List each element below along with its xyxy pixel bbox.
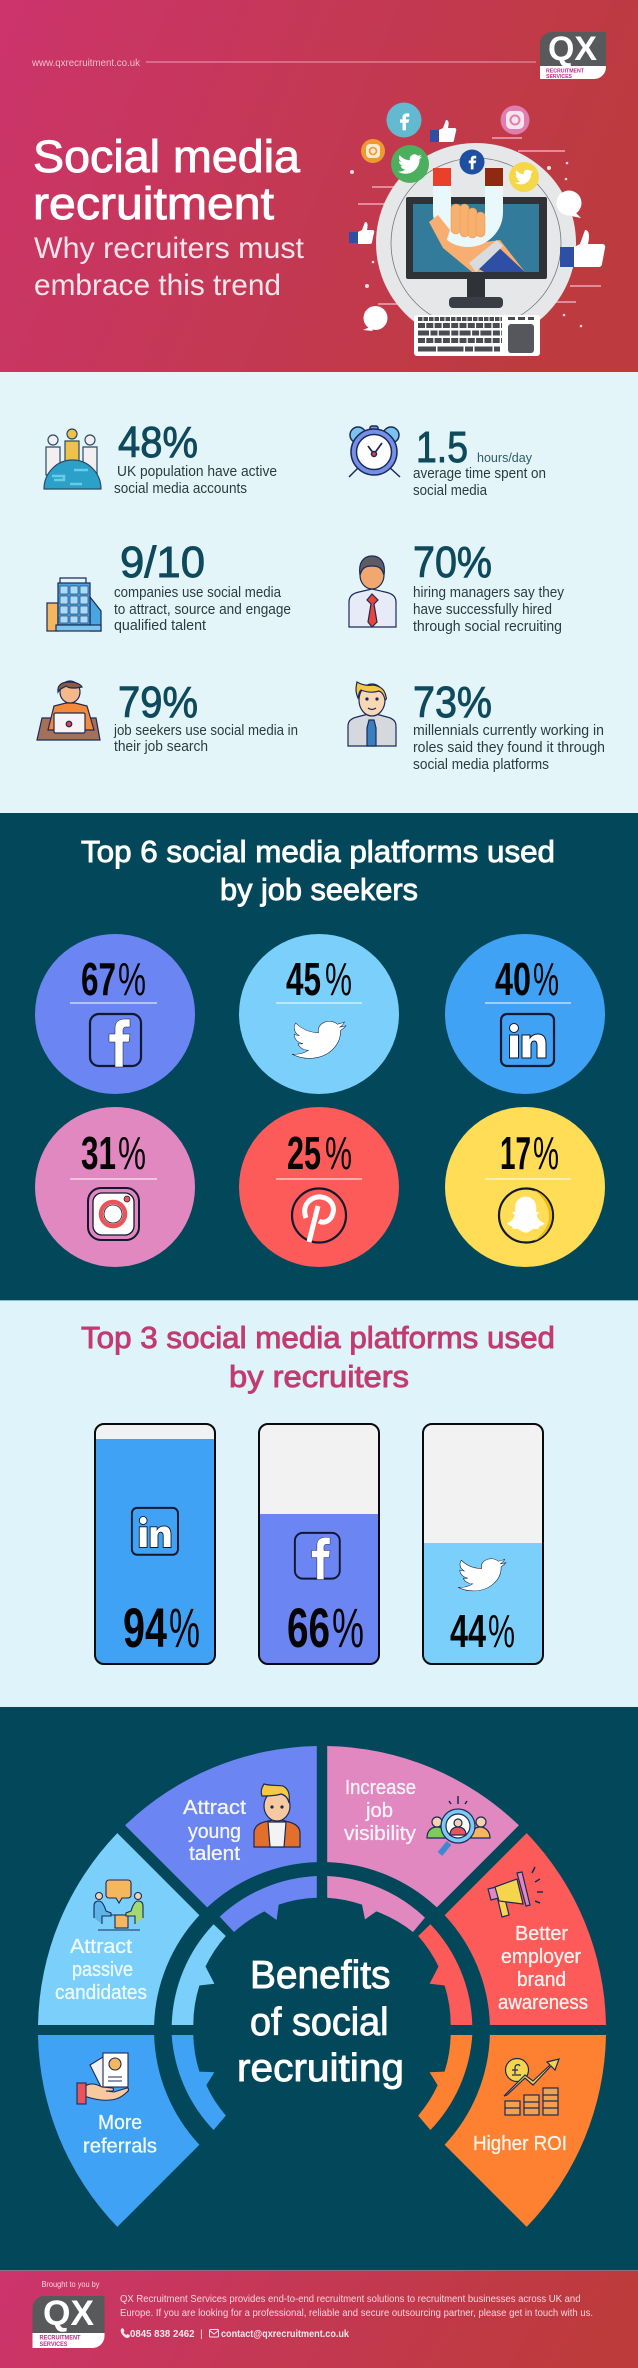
panel: hero header <box>0 0 638 372</box>
segment: attract young talent: young <box>188 1821 241 1843</box>
segment: increase job visibility: job <box>365 1800 393 1822</box>
stat: 9 out of 10: qualified talent <box>114 618 206 634</box>
panel: benefits of social recruiting <box>0 1707 638 2270</box>
monitor <box>406 197 547 308</box>
icon: search candidates <box>427 1796 490 1854</box>
heading: Top 6 social media platforms used <box>81 834 555 869</box>
segment: better employer brand awareness <box>418 1833 606 2025</box>
company description: QX Recruitment Services provides end-to-end recruitment solutions to recruitment businesses across UK and <box>120 2293 581 2305</box>
stat: 48 percent: 48% <box>118 418 198 467</box>
segment: attract young talent: Attract <box>183 1797 246 1819</box>
circle: snapchat 17 percent: % <box>533 1127 559 1179</box>
centre heading: Benefits <box>250 1954 390 1997</box>
icon: office building <box>47 578 101 631</box>
logo: QX recruitment services <box>540 30 606 80</box>
bar: linkedin 94 percent: % <box>169 1596 200 1659</box>
segment: increase job visibility <box>327 1746 519 1932</box>
circle: instagram 31 percent <box>35 1107 195 1267</box>
panel: top 3 platforms for recruiters <box>0 1300 638 1707</box>
heading: Top 3 social media platforms used <box>81 1320 555 1355</box>
circle: facebook 67 percent: % <box>118 953 146 1005</box>
contact details: 0845 838 2462 <box>130 2328 195 2340</box>
panel: footer <box>0 2270 638 2368</box>
subtitle: Why recruiters must <box>34 232 305 265</box>
icon: referral hand <box>77 2053 128 2104</box>
panel: top 6 platforms for job seekers <box>0 813 638 1300</box>
company description: Europe. If you are looking for a professional, reliable and secure outsourcing partner, please get in touch with us. <box>120 2307 593 2319</box>
icon: return on investment <box>504 2058 559 2115</box>
icon: linkedin <box>132 1508 178 1555</box>
segment: better employer brand awareness: brand <box>517 1969 566 1991</box>
stat: 9 out of 10 <box>47 538 291 634</box>
bar: facebook 66 percent <box>259 1424 379 1664</box>
heading <box>81 1320 555 1394</box>
icon: job seeker at laptop <box>37 681 100 740</box>
brought to you by label: Brought to you by <box>42 2279 100 2289</box>
circle: facebook 67 percent: 67 <box>81 953 116 1005</box>
segment: attract passive candidates <box>38 1833 226 2025</box>
company description <box>120 2293 593 2319</box>
stat: 73 percent: social media platforms <box>413 757 549 773</box>
circle: twitter 45 percent <box>239 934 399 1094</box>
centre heading: recruiting <box>237 2047 404 2090</box>
circle: linkedin 40 percent: 40 <box>495 953 531 1005</box>
illustration: magnet attracting social media <box>349 102 605 356</box>
thumbs up icons <box>349 120 605 267</box>
segment: higher ROI: Higher ROI <box>473 2133 567 2155</box>
icon: facebook <box>295 1533 340 1580</box>
contact details: contact@qxrecruitment.co.uk <box>221 2328 349 2340</box>
bar: twitter 44 percent <box>423 1424 543 1664</box>
speech bubbles <box>363 190 582 331</box>
logo: QX recruitment services: RECRUITMENT <box>40 2334 81 2342</box>
icon: millennial worker <box>348 682 396 746</box>
centre heading: of social <box>250 2001 388 2044</box>
segment: increase job visibility: visibility <box>344 1823 416 1845</box>
bar: facebook 66 percent: 66 <box>287 1596 330 1659</box>
stat: 73 percent <box>348 678 605 773</box>
title: recruitment <box>33 178 275 229</box>
icon: alarm clock <box>349 426 400 477</box>
heading: by job seekers <box>220 872 418 907</box>
segment: higher ROI <box>418 2035 606 2227</box>
circle: pinterest 25 percent <box>239 1107 399 1267</box>
segment: more referrals <box>38 2035 226 2227</box>
icon: hiring manager <box>349 556 396 627</box>
circle: facebook 67 percent <box>35 934 195 1094</box>
stat: 79 percent <box>37 678 298 755</box>
segment: increase job visibility: Increase <box>345 1777 416 1799</box>
stat: 1.5 hours per day: social media <box>413 483 488 499</box>
stat: 70 percent <box>349 538 565 635</box>
icon: twitter <box>458 1559 506 1591</box>
logo: QX recruitment services: RECRUITMENT <box>546 68 584 74</box>
bar: twitter 44 percent: 44 <box>450 1605 486 1657</box>
icon: twitter <box>292 1021 346 1058</box>
segment: better employer brand awareness: employer <box>501 1946 581 1968</box>
circle: instagram 31 percent: 31 <box>81 1127 116 1179</box>
icon: meeting <box>94 1880 143 1930</box>
logo: QX recruitment services <box>32 2294 104 2348</box>
stat: 73 percent: millennials currently working in <box>413 723 604 739</box>
segment: attract passive candidates: passive <box>72 1959 133 1981</box>
hand and magnet <box>429 168 525 272</box>
panel: key statistics <box>0 372 638 813</box>
stat: 70 percent: have successfully hired <box>413 602 552 618</box>
segment: attract young talent: talent <box>189 1843 240 1865</box>
stat: 9 out of 10: to attract, source and engage <box>114 602 291 618</box>
icon: snapchat <box>499 1188 553 1242</box>
stat: 48 percent: UK population have active <box>117 464 277 480</box>
stat: 9 out of 10: companies use social media <box>114 585 282 601</box>
stat: 73 percent: roles said they found it through <box>413 740 605 756</box>
icon: pinterest <box>292 1188 346 1242</box>
icon: people on globe <box>44 429 101 489</box>
bar: linkedin 94 percent: 94 <box>123 1596 167 1659</box>
centre heading <box>237 1954 404 2090</box>
heading <box>81 834 555 907</box>
title: Social media <box>33 131 301 182</box>
icon: instagram <box>88 1188 139 1240</box>
circle: pinterest 25 percent: % <box>325 1127 352 1179</box>
segment: better employer brand awareness: Better <box>515 1923 568 1945</box>
stat: 70 percent: through social recruiting <box>413 619 562 635</box>
circle: instagram 31 percent: % <box>118 1127 146 1179</box>
circle: linkedin 40 percent: % <box>533 953 559 1005</box>
stat: 9 out of 10: 9/10 <box>120 538 205 587</box>
stat: 48 percent: social media accounts <box>114 481 247 497</box>
segment: attract passive candidates: candidates <box>55 1982 147 2004</box>
icon: linkedin <box>501 1014 554 1066</box>
icon: facebook <box>90 1014 141 1067</box>
keyboard <box>414 315 540 356</box>
stat: 1.5 hours per day: 1.5 <box>416 423 468 472</box>
circle: snapchat 17 percent: 17 <box>500 1127 531 1179</box>
logo: QX recruitment services: QX <box>43 2294 95 2333</box>
stat: 1.5 hours per day: average time spent on <box>413 466 546 482</box>
stat: 79 percent: 79% <box>118 678 198 727</box>
subtitle <box>34 232 305 302</box>
title <box>33 131 301 229</box>
segment: attract young talent <box>125 1746 317 1932</box>
website address: www.qxrecruitment.co.uk <box>31 57 141 69</box>
bar: facebook 66 percent: % <box>332 1596 364 1659</box>
icon: megaphone <box>488 1867 543 1917</box>
bar: linkedin 94 percent <box>95 1424 215 1664</box>
circle: linkedin 40 percent <box>445 934 605 1094</box>
stat: 70 percent: 70% <box>413 538 492 587</box>
segment: better employer brand awareness: awareness <box>498 1992 588 2014</box>
social icon bubbles <box>361 102 539 192</box>
contact details <box>121 2328 349 2340</box>
stat: 1.5 hours per day <box>349 423 546 499</box>
stat: 1.5 hours per day: hours/day <box>477 450 532 465</box>
stat: 48 percent <box>44 418 277 497</box>
circle: twitter 45 percent: 45 <box>286 953 321 1005</box>
heading: by recruiters <box>229 1359 409 1394</box>
circle: snapchat 17 percent <box>445 1107 605 1267</box>
circle: twitter 45 percent: % <box>325 953 352 1005</box>
logo: QX recruitment services: SERVICES <box>546 74 572 80</box>
stat: 79 percent: their job search <box>114 739 208 755</box>
subtitle: embrace this trend <box>34 269 281 302</box>
segment: more referrals: referrals <box>83 2136 157 2158</box>
segment: more referrals: More <box>98 2112 142 2134</box>
circle: pinterest 25 percent: 25 <box>287 1127 321 1179</box>
contact details: | <box>200 2328 203 2340</box>
stat: 73 percent: 73% <box>413 678 492 727</box>
stat: 70 percent: hiring managers say they <box>413 585 565 601</box>
logo: QX recruitment services: SERVICES <box>40 2341 68 2348</box>
bar: twitter 44 percent: % <box>488 1605 515 1657</box>
icon: young person <box>254 1784 300 1847</box>
logo: QX recruitment services: QX <box>548 30 597 68</box>
segment: attract passive candidates: Attract <box>70 1936 132 1958</box>
stat: 79 percent: job seekers use social media in <box>113 723 298 739</box>
